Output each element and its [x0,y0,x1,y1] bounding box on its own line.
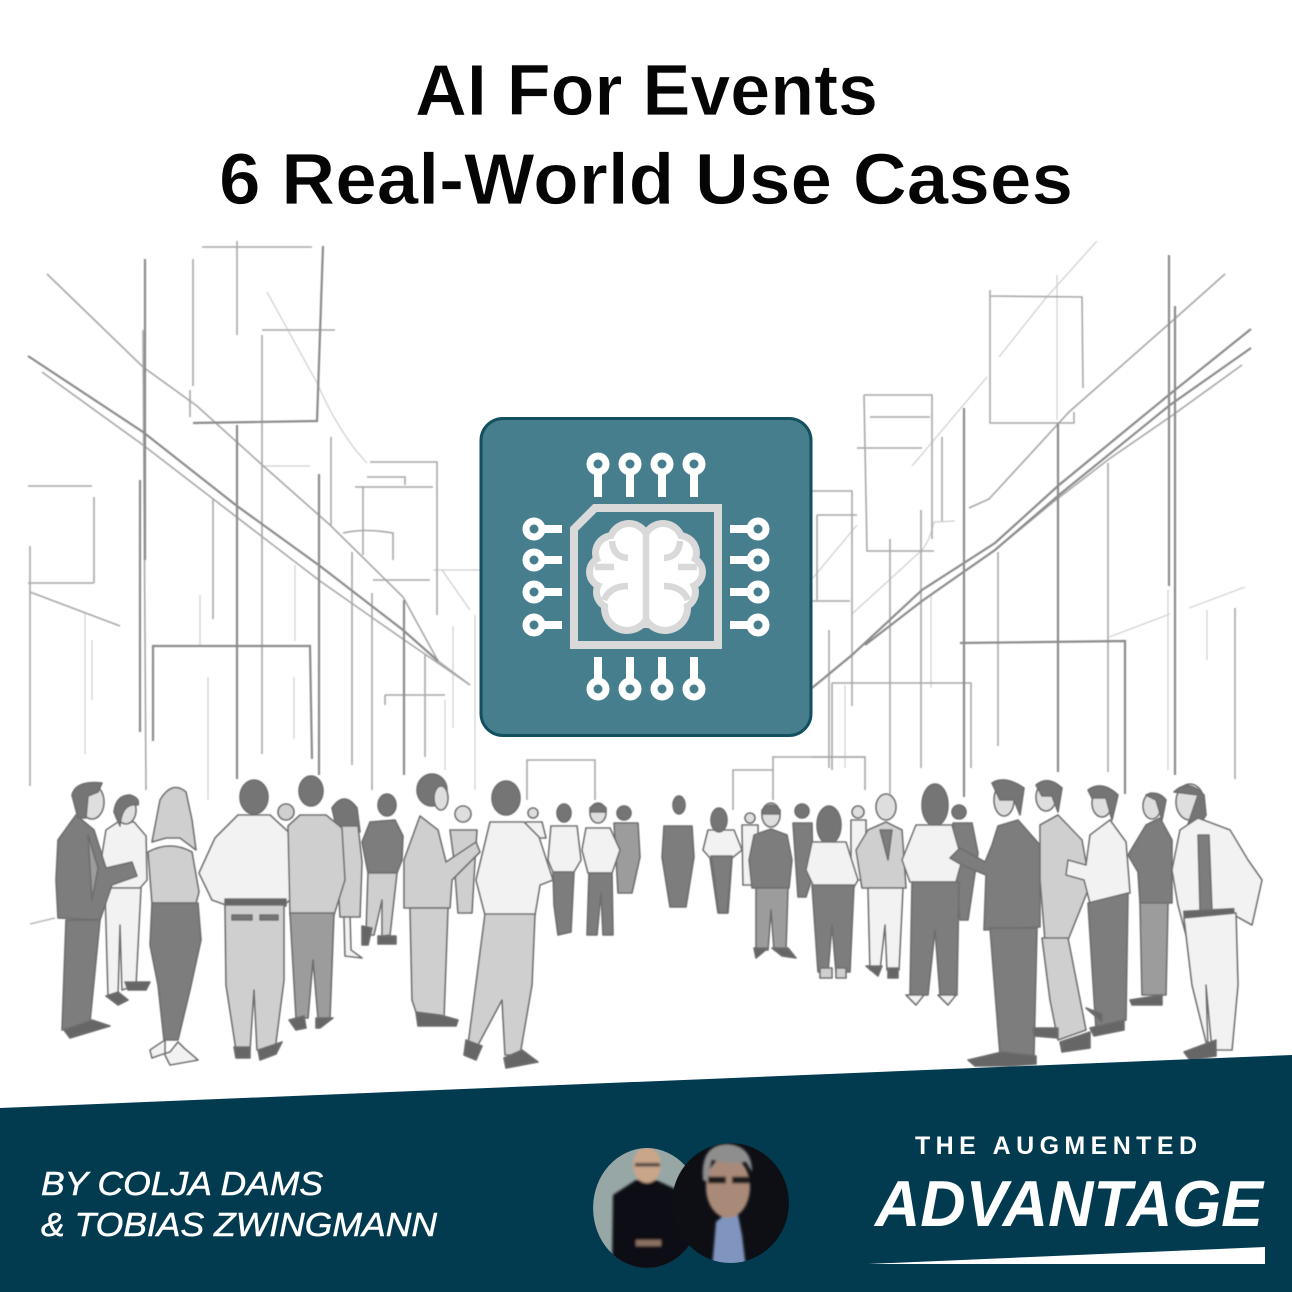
title [219,51,1073,220]
woman in light top [102,795,150,1005]
title: 6 Real-World Use Cases [219,140,1073,220]
man in white jacket with beard [1172,784,1262,1060]
crowd of attendees [56,774,1262,1068]
man from back, dark jacket [362,794,403,945]
central AI chip icon [481,418,811,736]
logo: The Augmented Advantage: THE AUGMENTED [915,1132,1197,1160]
authors byline: & TOBIAS ZWINGMANN [41,1206,437,1243]
background figures [278,796,978,920]
sketch background: city hall lines [28,241,1251,924]
man in dark suit, arms crossed [1128,793,1172,1005]
author portrait: left [593,1148,689,1268]
small man, white shirt back [548,804,581,935]
logo swoosh [868,1247,1265,1264]
man from back, light suit [288,776,345,1030]
icon: brain [586,520,706,634]
left foreground group [56,774,620,1068]
man from back, white shirt [199,780,307,1060]
right foreground group [749,780,1262,1066]
icon tile [481,418,811,736]
blonde woman from back [148,788,201,1065]
man in light suit, front [856,794,906,978]
footer band [0,1055,1292,1292]
man in light suit, profile [404,774,480,1026]
man in dark suit, gesturing [950,780,1040,1066]
small woman in dress [332,799,362,958]
woman from back, white top [902,784,962,1005]
man in dark suit, front [749,803,796,958]
icon: chip outline [574,508,718,645]
logo: The Augmented Advantage [868,1132,1265,1264]
author portrait: right [672,1143,789,1268]
icon: circuit pins [534,464,758,690]
man in dark suit [56,782,137,1038]
small man, white shirt front [582,803,620,935]
logo: The Augmented Advantage: ADVANTAGE [873,1167,1265,1240]
authors byline: BY COLJA DAMS [41,1165,323,1202]
man from back, white shirt walking [464,781,553,1068]
woman from back, grey trousers [806,806,858,978]
title: AI For Events [415,51,878,131]
authors byline [41,1165,437,1243]
man in light jacket, profile [1033,781,1090,1052]
man in white shirt, glasses [1066,786,1130,1036]
